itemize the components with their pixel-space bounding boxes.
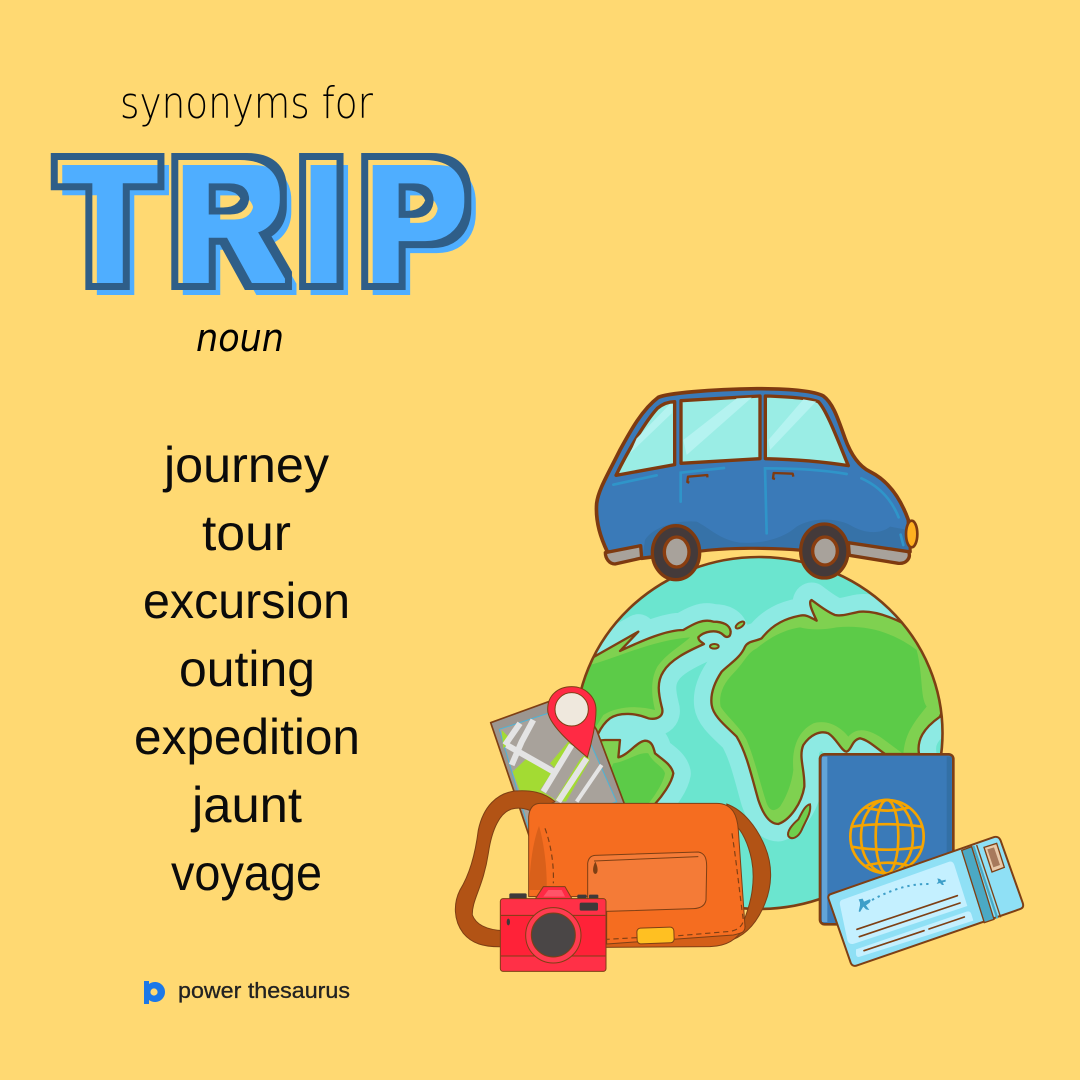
heading: synonyms for: synonyms for xyxy=(120,78,374,129)
bag pocket xyxy=(588,852,707,912)
continent inner shades xyxy=(583,638,690,727)
passport globe emblem xyxy=(850,800,924,873)
synonym list xyxy=(134,437,360,901)
car door handles xyxy=(687,473,793,483)
bag body xyxy=(529,803,745,944)
logo: power thesaurus xyxy=(144,978,350,1004)
bag bottom xyxy=(600,927,745,947)
illustration: globe xyxy=(560,557,953,909)
icon: power thesaurus mark xyxy=(144,981,165,1004)
title fill layer: TRIP xyxy=(68,133,474,326)
continent outlines xyxy=(594,598,940,826)
window reflections xyxy=(630,398,816,455)
car body xyxy=(596,389,910,558)
synonym: voyage: voyage xyxy=(171,845,322,901)
illustration: car xyxy=(596,389,917,580)
ticket lines xyxy=(857,896,964,951)
camera xyxy=(500,887,606,971)
bag buckle xyxy=(637,927,674,944)
islands xyxy=(735,620,745,630)
plane icons xyxy=(859,878,946,912)
bag left strap xyxy=(455,791,555,947)
part of speech: noun: noun xyxy=(196,316,284,360)
bag right strap xyxy=(727,804,771,942)
brand name: power thesaurus xyxy=(178,978,350,1003)
synonym: expedition: expedition xyxy=(134,709,360,765)
illustration: map and bag group xyxy=(455,687,771,971)
car wheels xyxy=(652,524,848,580)
synonym: journey: journey xyxy=(162,437,329,493)
continents xyxy=(591,602,940,823)
title: TRIP xyxy=(60,124,474,326)
map roads xyxy=(505,720,602,802)
ticket panels xyxy=(840,862,967,944)
ticket stripes xyxy=(962,847,994,923)
bag stitching xyxy=(545,828,743,939)
passport xyxy=(820,754,953,924)
car highlights xyxy=(613,468,903,545)
ticket flight path xyxy=(872,884,930,900)
illustration: passport and ticket xyxy=(820,754,1023,966)
synonym: excursion: excursion xyxy=(143,573,350,629)
synonym: tour: tour xyxy=(202,505,291,561)
car lower shade xyxy=(643,520,909,556)
bag side fold xyxy=(529,826,547,890)
map green areas xyxy=(502,730,590,808)
map tablet xyxy=(491,687,627,843)
car bumpers xyxy=(605,543,909,564)
pin xyxy=(548,687,596,757)
title outline layer: TRIP xyxy=(60,124,466,318)
ticket xyxy=(828,837,1023,966)
ticket barcode xyxy=(984,843,1004,872)
car windows xyxy=(616,396,848,475)
synonym: jaunt: jaunt xyxy=(190,777,302,833)
ocean light bands xyxy=(560,600,953,824)
car headlight xyxy=(906,521,917,547)
synonym: outing: outing xyxy=(179,641,315,697)
